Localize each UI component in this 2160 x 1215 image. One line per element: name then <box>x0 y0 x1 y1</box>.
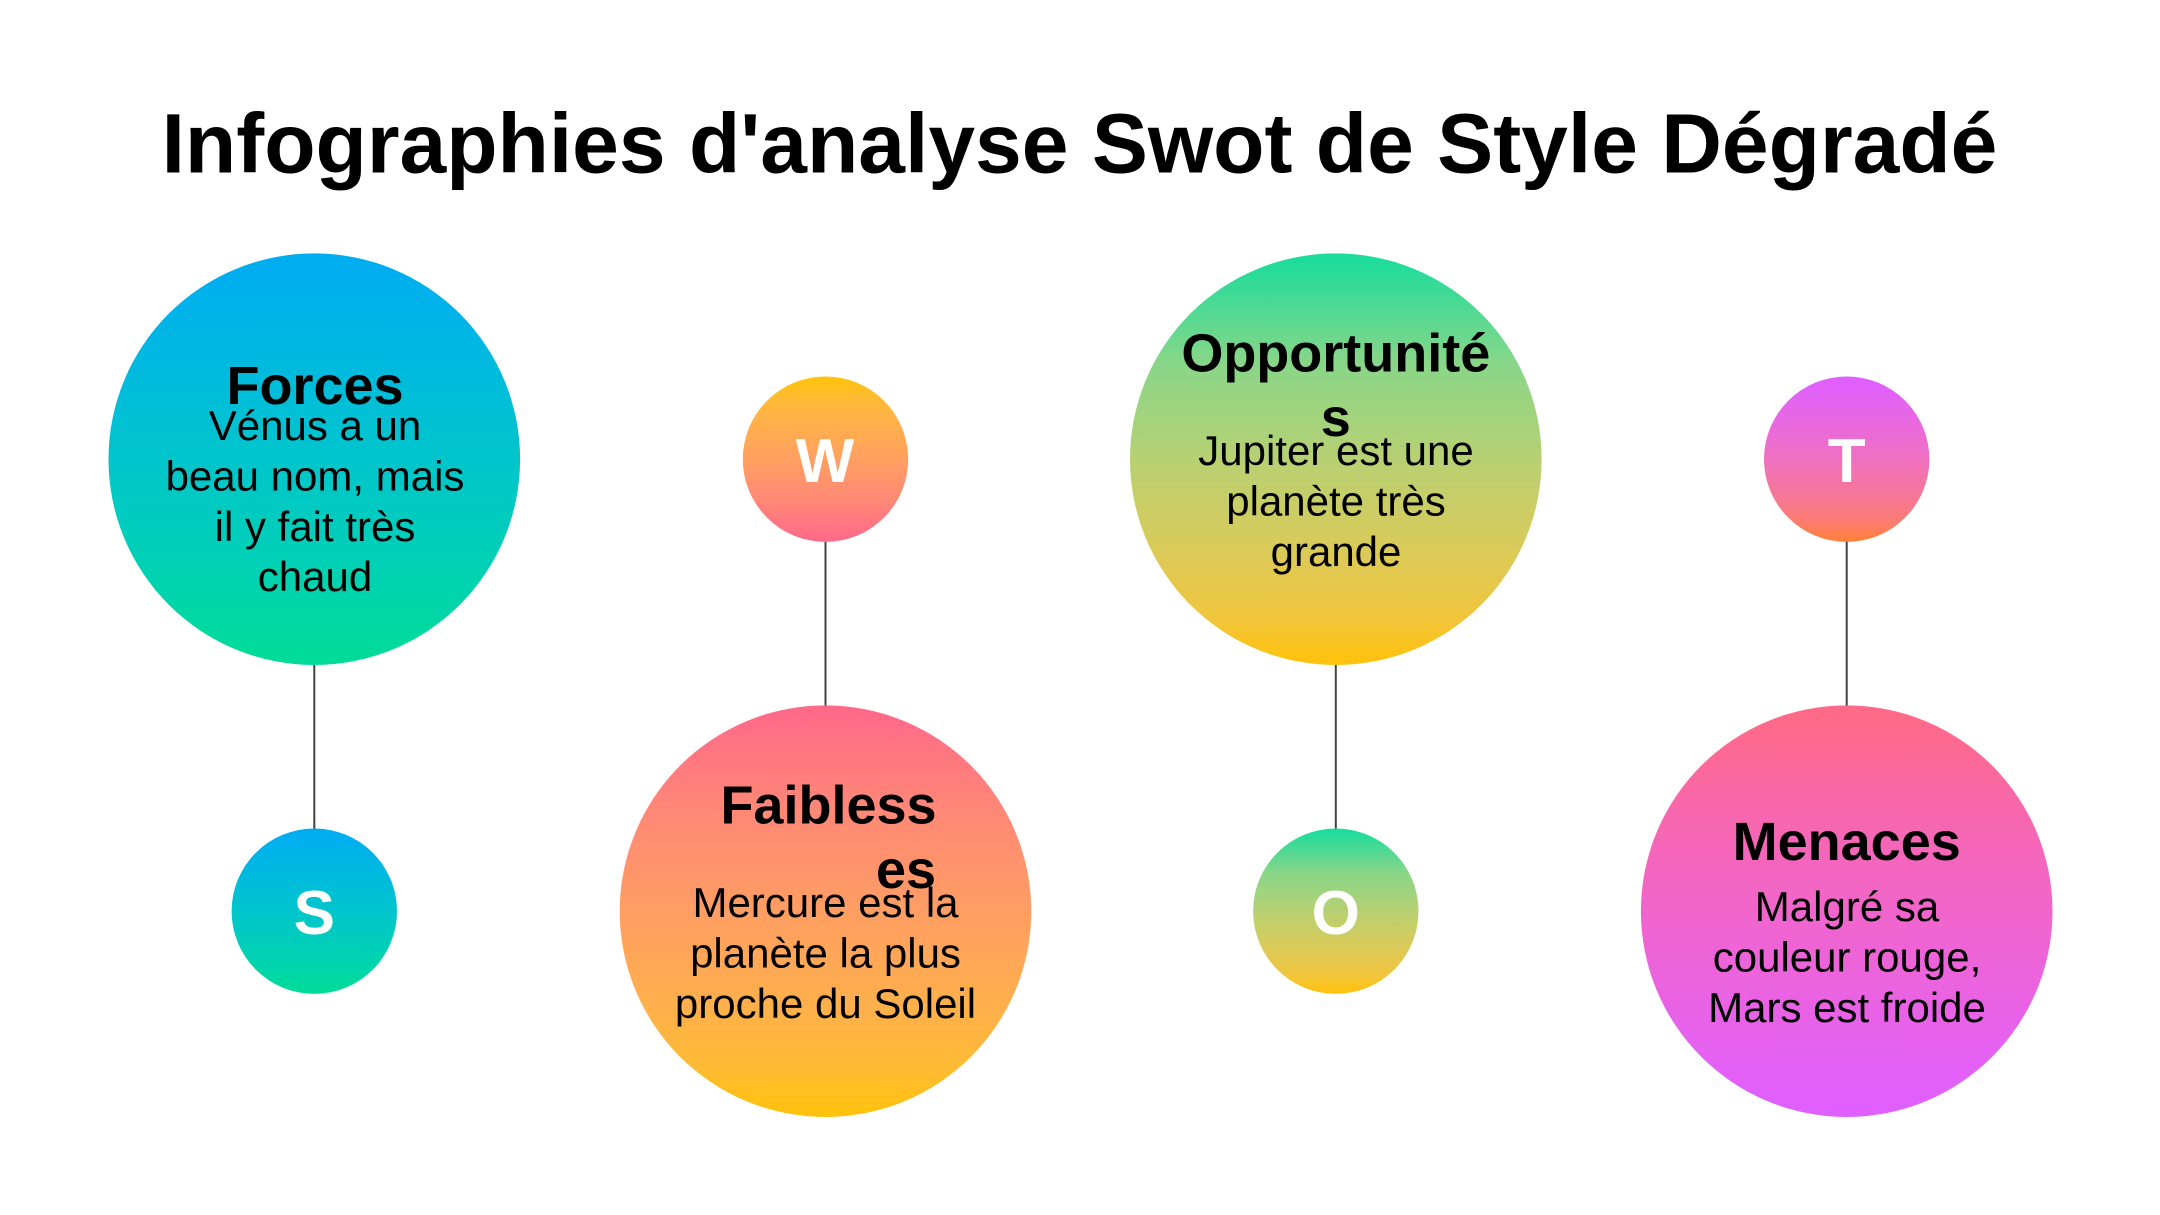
connector: Opportunités to O <box>1335 664 1337 830</box>
text: Opportunités description: planète très <box>1226 478 1446 524</box>
badge: T: T <box>1828 427 1866 496</box>
text: Menaces description: Mars est froide <box>1708 984 1986 1031</box>
text: Menaces description: Malgré sa <box>1755 883 1940 930</box>
text: Opportunités description: Jupiter est une <box>1198 427 1474 474</box>
heading: Opportunités: s <box>1321 388 1351 448</box>
text: Forces description: Vénus a un <box>209 402 421 449</box>
heading: Opportunités: Opportunité <box>1181 324 1490 384</box>
text: Faiblesses description: Mercure est la <box>692 879 959 926</box>
panel: Menaces <box>1641 705 2052 1117</box>
heading: Forces: Forces <box>226 356 404 416</box>
text: Opportunités description <box>1198 427 1474 575</box>
text: Opportunités description: grande <box>1271 528 1401 575</box>
connector: Forces to S <box>313 664 315 830</box>
text: Forces description: beau nom, mais <box>166 452 464 500</box>
text: Faiblesses description: proche du Soleil <box>675 980 976 1027</box>
panel: Opportunités <box>1130 253 1542 665</box>
text: Forces description <box>166 402 464 600</box>
text: Forces description: chaud <box>258 553 372 600</box>
heading: Menaces: Menaces <box>1733 812 1961 872</box>
panel: Forces <box>108 253 520 665</box>
badge: O <box>1253 828 1419 994</box>
text: Faiblesses description: planète la plus <box>690 930 961 976</box>
connector: T to Menaces <box>1846 541 1848 707</box>
title: Infographies d'analyse Swot de Style Dégradé <box>162 96 1997 190</box>
badge: S: S <box>294 879 335 948</box>
text: Menaces description: couleur rouge, <box>1713 934 1981 980</box>
badge: W <box>743 376 908 542</box>
connector: W to Faiblesses <box>824 541 826 707</box>
text: Forces description: il y fait très <box>215 503 415 550</box>
badge: S <box>232 828 397 994</box>
text: Faiblesses description <box>675 879 976 1027</box>
badge: O: O <box>1312 879 1360 948</box>
badge: T <box>1764 376 1929 542</box>
text: Menaces description <box>1708 883 1986 1031</box>
badge: W: W <box>796 427 855 496</box>
panel: Faiblesses <box>620 705 1031 1117</box>
heading: Faiblesses <box>720 776 937 900</box>
heading: Faiblesses: Faibless <box>720 776 937 836</box>
heading: Faiblesses: es <box>876 840 936 900</box>
heading: Opportunités <box>1181 324 1490 448</box>
